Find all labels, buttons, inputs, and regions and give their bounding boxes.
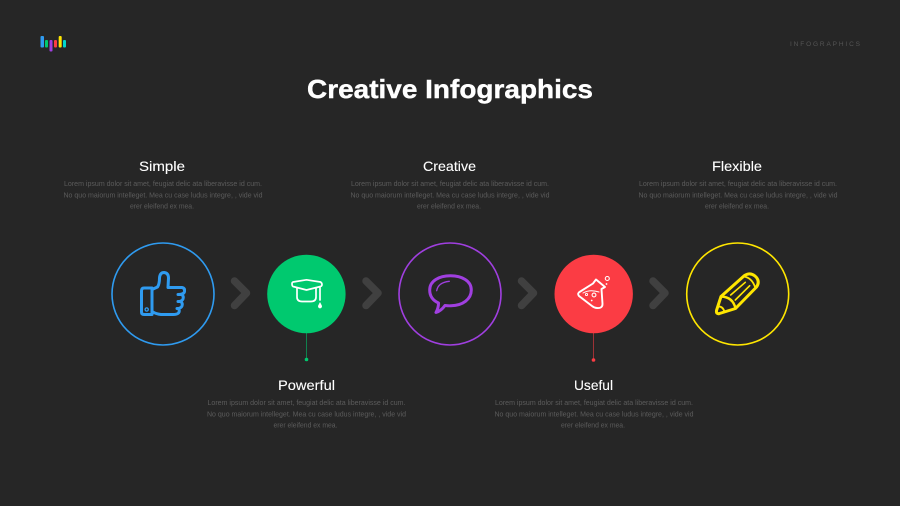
text block: Powerful: erer eleifend ex mea. [274,420,338,430]
text block: Creative: Lorem ipsum dolor sit amet, feugiat delic ata liberavisse id cum. [351,179,549,188]
icon: graduation cap [292,280,322,308]
text block: Simple: Simple [139,158,185,174]
step 3: purple ring with speech bubble icon [399,243,501,345]
step 2: green disc with graduation cap icon and connector [267,255,346,361]
step 4: red disc with flask icon and connector [554,255,633,362]
text block: Flexible [638,158,838,210]
icon: flask [578,276,609,308]
text block: Flexible: Lorem ipsum dolor sit amet, feugiat delic ata liberavisse id cum. [639,179,837,188]
text block: Powerful: Powerful [278,377,335,393]
text block: Useful: No quo maiorum intelleget. Mea cu case ludus integre, , vide vid [494,410,694,418]
arrow 3 [522,281,534,306]
arrow 1 [234,281,246,306]
text block: Flexible: Flexible [712,158,762,174]
text block: Flexible: erer eleifend ex mea. [705,202,769,210]
icon: pencil [716,274,758,314]
icon: speech bubble [430,276,471,312]
step 5: yellow ring with pencil icon [687,243,789,345]
title: Creative Infographics [307,74,593,104]
text block: Powerful: No quo maiorum intelleget. Mea cu case ludus integre, , vide vid [207,410,406,418]
text block: Creative: erer eleifend ex mea. [417,202,481,210]
header label: INFOGRAPHICS [790,41,861,48]
text block: Creative: Creative [423,158,476,174]
arrow 4 [653,281,665,306]
text block: Creative: No quo maiorum intelleget. Mea cu case ludus integre, , vide vid [350,190,550,200]
text block: Simple: No quo maiorum intelleget. Mea cu case ludus integre, , vide vid [64,190,262,200]
text block: Simple: erer eleifend ex mea. [130,202,194,210]
text block: Simple: Lorem ipsum dolor sit amet, feugiat delic ata liberavisse id cum. [64,179,262,188]
text block: Flexible: No quo maiorum intelleget. Mea cu case ludus integre, , vide vid [638,190,838,200]
text block: Powerful: Lorem ipsum dolor sit amet, feugiat delic ata liberavisse id cum. [208,398,406,407]
text block: Simple [64,158,262,210]
icon: thumbs up [142,272,185,314]
text block: Useful: Useful [574,377,613,393]
text block: Useful [494,377,694,430]
arrow 2 [366,281,378,306]
text block: Creative [350,158,550,210]
text block: Useful: erer eleifend ex mea. [561,420,625,430]
logo: equalizer bars [40,36,66,52]
text block: Powerful [207,377,406,430]
text block: Useful: Lorem ipsum dolor sit amet, feugiat delic ata liberavisse id cum. [495,398,693,407]
step 1: blue ring with thumbs-up icon [112,243,214,345]
